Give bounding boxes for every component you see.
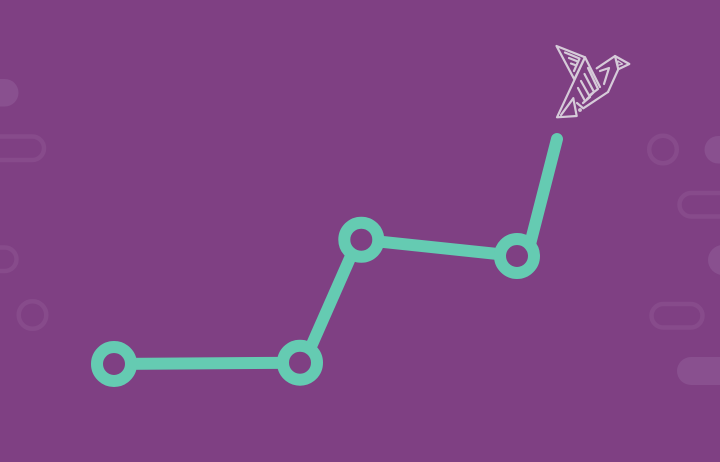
left wing xyxy=(556,46,585,79)
right wing and head xyxy=(597,56,629,92)
trend line xyxy=(114,139,557,364)
icon: origami bird xyxy=(556,46,629,117)
background shapes: right xyxy=(649,136,720,385)
data point 1 xyxy=(97,347,131,381)
background shapes: left xyxy=(0,79,46,329)
line chart xyxy=(97,139,557,381)
body xyxy=(557,57,608,117)
data point 4 xyxy=(500,239,534,273)
data point 3 xyxy=(344,223,378,257)
data point 2 xyxy=(283,346,317,380)
